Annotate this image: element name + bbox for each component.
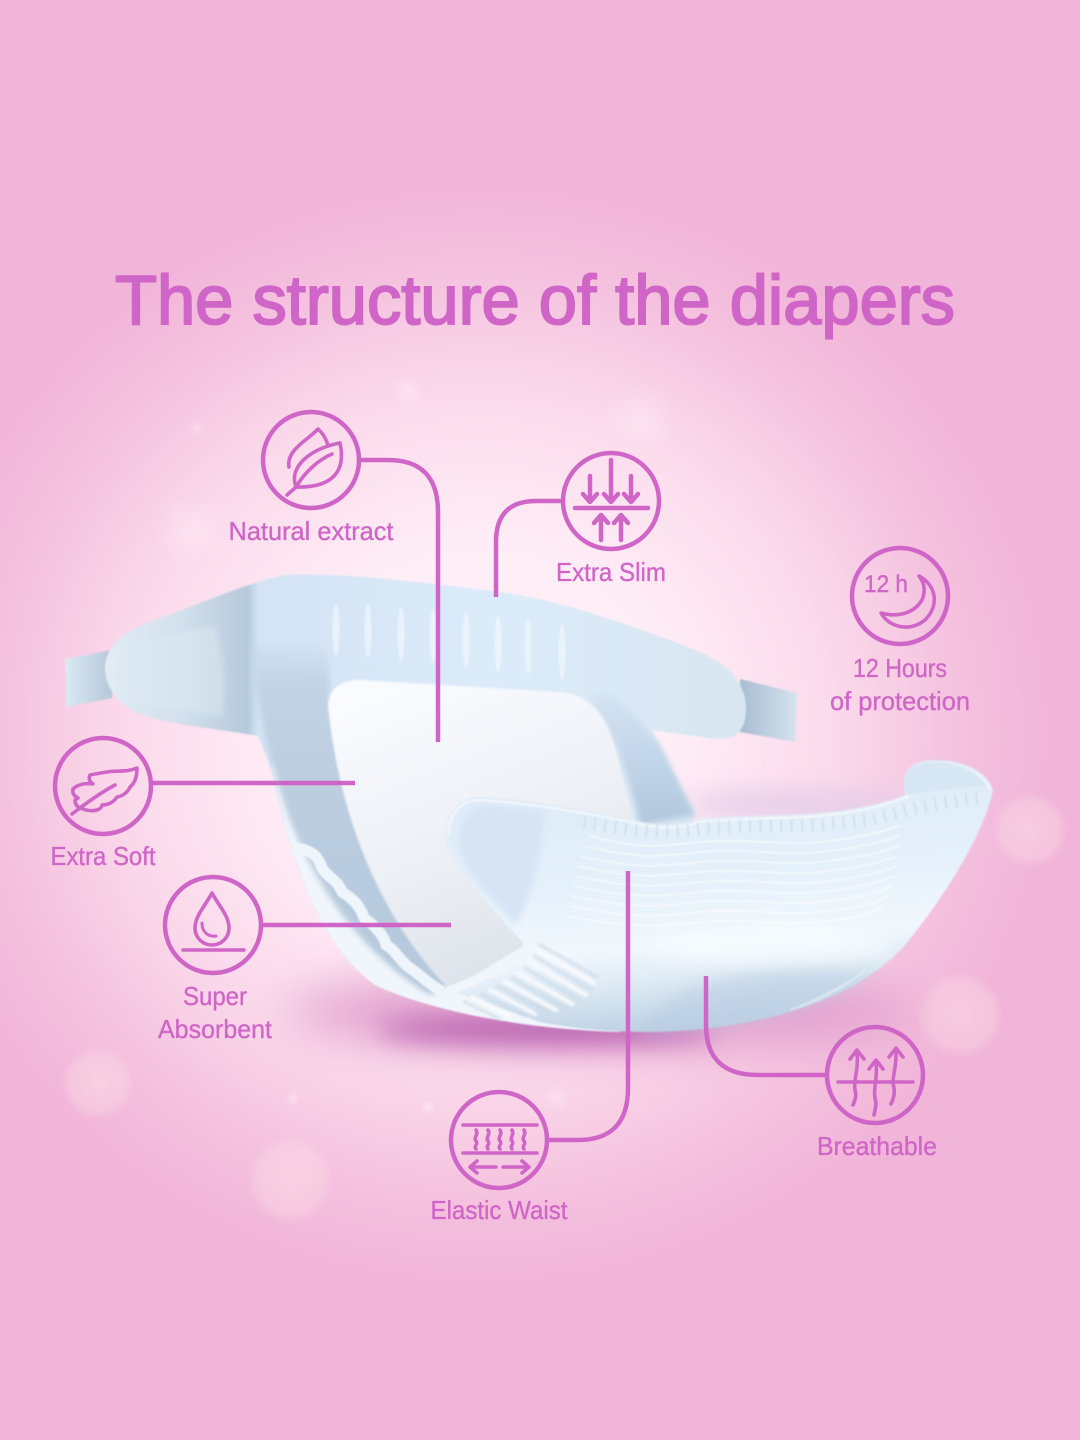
icon: drop — [165, 877, 261, 973]
callout: super absorbent — [158, 877, 273, 1044]
front panel — [445, 760, 993, 1032]
label line two: of protection — [830, 686, 970, 716]
perforations — [332, 604, 566, 680]
inner flap — [904, 762, 987, 795]
diaper illustration — [65, 574, 993, 1048]
outer hem — [272, 765, 640, 1032]
icon: air through layer — [827, 1027, 923, 1123]
label line two: Absorbent — [158, 1014, 273, 1044]
rim highlight — [448, 763, 990, 836]
bottom shading — [640, 968, 880, 1032]
leg frill — [297, 848, 440, 990]
back panel and body shell — [105, 574, 746, 1030]
left strap — [65, 650, 112, 707]
icon: moon — [852, 548, 948, 644]
absorbent pad — [328, 680, 635, 990]
icon: leaf — [263, 412, 359, 508]
label: Breathable — [817, 1131, 937, 1161]
label: Elastic Waist — [430, 1195, 568, 1225]
elastic wavy lines — [568, 826, 900, 926]
callout: natural extract — [228, 412, 394, 546]
connector: breathable — [706, 976, 826, 1075]
connector: elastic waist — [549, 871, 628, 1140]
title: The structure of the diapers — [115, 261, 955, 339]
label: Super — [183, 981, 247, 1011]
icon text: 12 h — [864, 571, 908, 598]
inner shadow band — [253, 640, 470, 995]
left wing inset — [118, 625, 224, 716]
connector: natural extract — [360, 460, 438, 742]
front wing inner shading — [458, 806, 545, 925]
crotch ruffles — [450, 935, 596, 1018]
right inner band — [590, 692, 695, 825]
icon: compression arrows — [563, 453, 659, 549]
soft belly highlight — [650, 925, 890, 965]
right strap — [740, 679, 797, 742]
label: 12 Hours — [853, 653, 947, 683]
connector: super absorbent — [262, 923, 451, 927]
connector: extra slim — [496, 501, 562, 597]
waist ticks — [584, 798, 980, 832]
icon: elastic layers — [451, 1092, 547, 1188]
right fold lines — [790, 965, 870, 1010]
callout: breathable — [817, 1027, 937, 1161]
label: Extra Soft — [50, 841, 156, 871]
icon: feather — [55, 738, 151, 834]
ground shadow — [285, 793, 920, 1048]
label: Extra Slim — [556, 557, 666, 587]
callout: 12 hours — [830, 548, 970, 716]
callout: extra soft — [50, 738, 156, 871]
callout: extra slim — [556, 453, 666, 587]
label: Natural extract — [228, 516, 394, 546]
callout: elastic waist — [430, 1092, 568, 1225]
connector: extra soft — [153, 781, 355, 785]
